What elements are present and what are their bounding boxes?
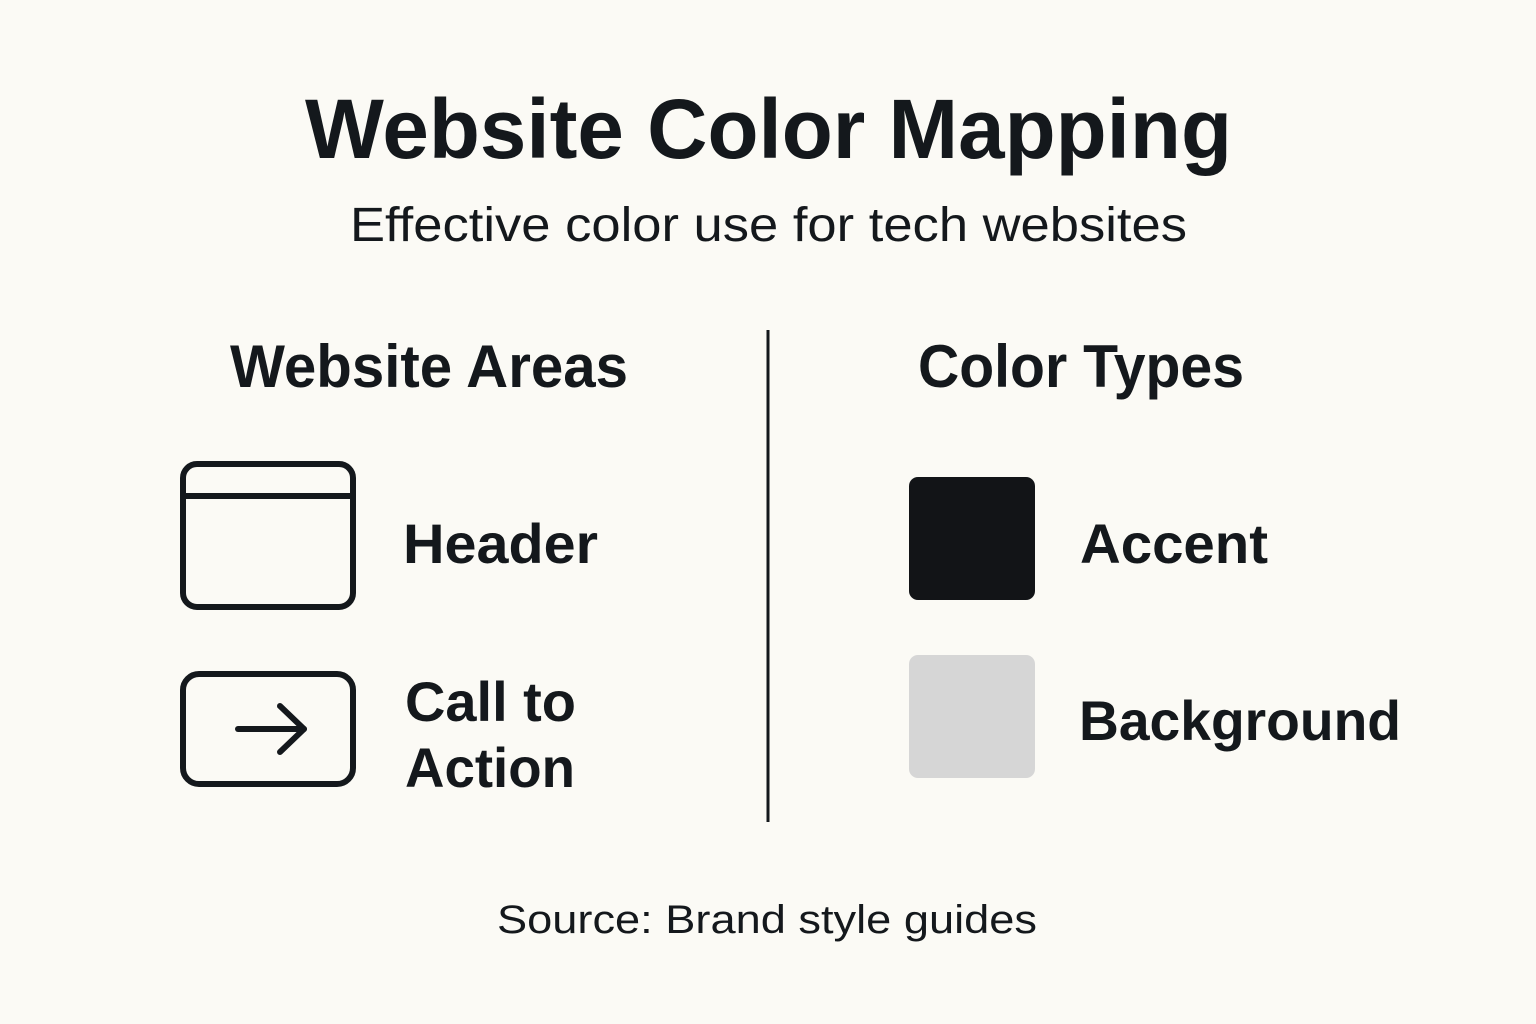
source note: Source: Brand style guides [497,898,1037,942]
label: call to action: Call to [405,670,576,733]
swatch: accent [909,477,1035,600]
label: accent: Accent [1080,512,1268,575]
label: call to action: Action [405,736,575,799]
heading: color types: Color Types [918,333,1244,400]
title: Website Color Mapping [305,82,1232,176]
label: call to action [405,670,576,799]
swatch: background [909,655,1035,778]
label: header: Header [403,512,598,575]
icon: header window [183,464,353,607]
label: background: Background [1079,689,1401,752]
icon: call to action button [183,674,353,784]
subtitle: Effective color use for tech websites [350,199,1187,252]
heading: website areas: Website Areas [230,333,628,400]
